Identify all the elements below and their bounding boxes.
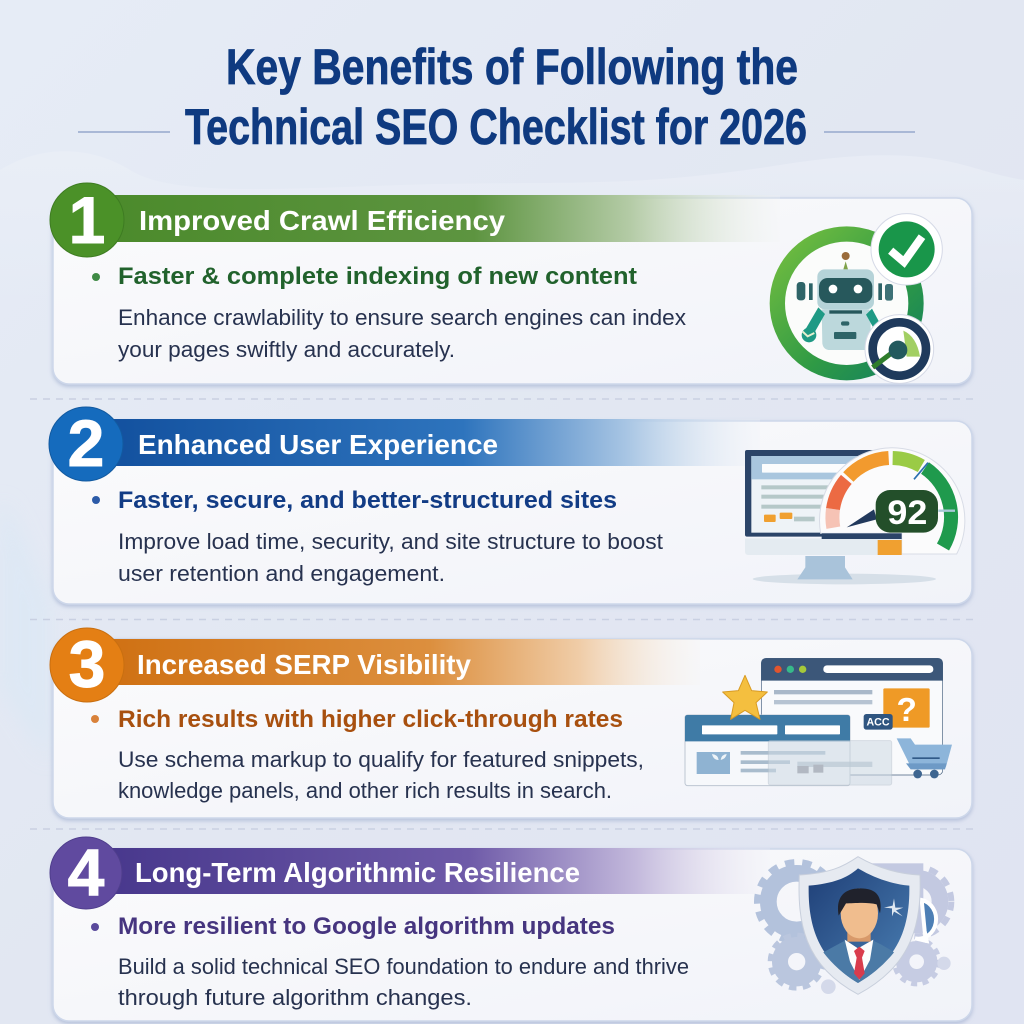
subheading 1: Faster & complete indexing of new content: [118, 263, 637, 290]
body text 3: Use schema markup to qualify for featured snippets,: [118, 747, 644, 772]
body text 3: [118, 747, 644, 803]
body text 2: user retention and engagement.: [118, 561, 445, 586]
bullet 4: [91, 923, 99, 931]
panel: increased serp visibility: [50, 627, 972, 818]
number badge 2: [49, 406, 123, 481]
icon: search result windows with star and cart: ?: [896, 692, 917, 729]
bullet 1: [92, 273, 100, 281]
header band 1: [100, 195, 780, 242]
icon: search result windows with star and cart: [685, 658, 952, 786]
number badge 4: [50, 835, 122, 909]
icon: robot with check and gauge: [777, 214, 942, 383]
subheading 4: More resilient to Google algorithm updates: [118, 913, 615, 940]
body text 2: [118, 529, 664, 586]
body text 4: Build a solid technical SEO foundation to endure and thrive: [118, 954, 689, 979]
number badge 1: [50, 183, 124, 257]
body text 4: [118, 954, 689, 1010]
title: [185, 39, 807, 155]
panel: enhanced user experience: [49, 406, 972, 604]
number badge 3: 3: [69, 627, 105, 701]
title: Technical SEO Checklist for 2026: [185, 99, 807, 155]
icon: monitor with speed gauge: [745, 448, 965, 584]
bullet 3: [91, 715, 99, 723]
bullet 2: [92, 496, 100, 504]
header band 2: [100, 419, 760, 466]
body text 3: knowledge panels, and other rich results in search.: [118, 778, 612, 803]
subheading 3: Rich results with higher click-through rates: [118, 706, 623, 733]
icon: shield with person and gears: [757, 857, 951, 994]
icon: search result windows with star and cart: ACC: [866, 717, 890, 729]
body text 1: your pages swiftly and accurately.: [118, 337, 455, 362]
number badge 4: 4: [68, 835, 105, 909]
heading 2: Enhanced User Experience: [138, 429, 498, 460]
header band 4: [100, 848, 770, 894]
number badge 1: 1: [69, 183, 105, 257]
heading 4: Long-Term Algorithmic Resilience: [135, 857, 580, 888]
header band 3: [100, 639, 700, 685]
subheading 2: Faster, secure, and better-structured sites: [118, 487, 617, 514]
body text 4: through future algorithm changes.: [118, 985, 472, 1010]
number badge 3: [50, 627, 124, 702]
panel: long-term algorithmic resilience: [50, 835, 972, 1021]
body text 1: Enhance crawlability to ensure search engines can index: [118, 305, 687, 330]
body text 2: Improve load time, security, and site structure to boost: [118, 529, 664, 554]
heading 3: Increased SERP Visibility: [137, 649, 471, 680]
icon: monitor with speed gauge: 92: [887, 494, 927, 532]
panel: improved crawl efficiency: [50, 183, 972, 384]
body text 1: [118, 305, 687, 362]
title: Key Benefits of Following the: [226, 39, 798, 95]
heading 1: Improved Crawl Efficiency: [139, 205, 505, 236]
number badge 2: 2: [68, 406, 104, 480]
